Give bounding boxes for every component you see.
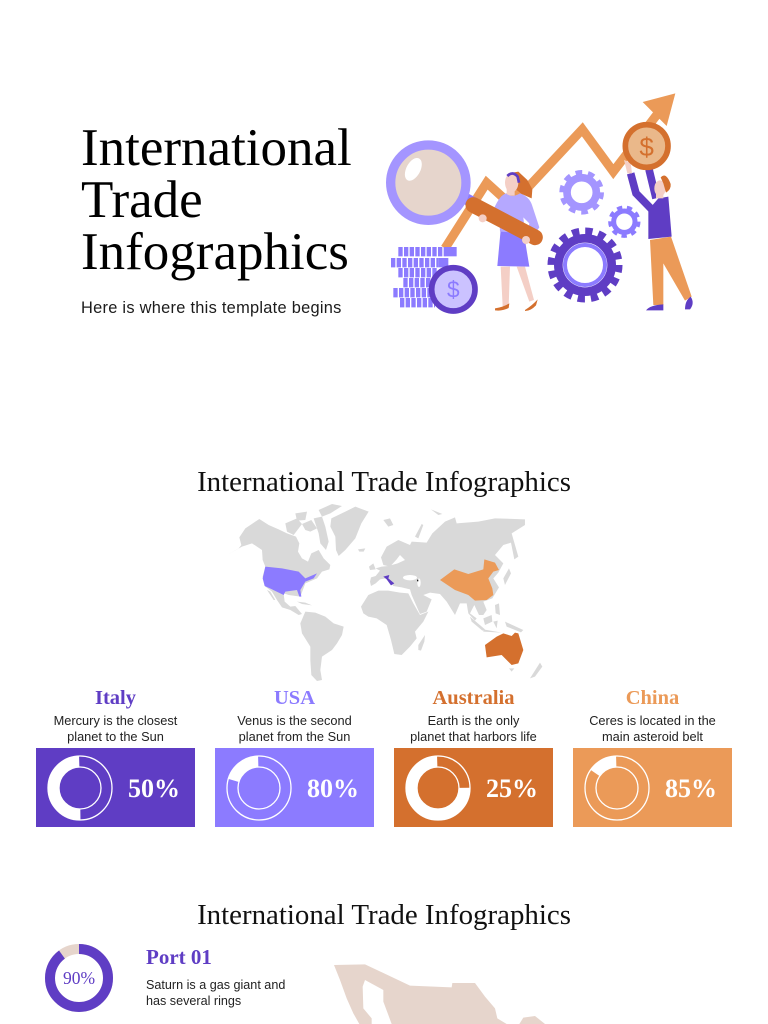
world map	[238, 504, 542, 681]
text: Australia description: planet that harbors life	[410, 729, 537, 744]
donut: USA	[227, 756, 291, 820]
text: China description: Ceres is located in the	[589, 713, 716, 728]
value: 80%: 80%	[307, 774, 359, 803]
country column: Italy	[54, 687, 178, 744]
illustration: trade growth with people, gears and coins	[386, 93, 693, 314]
icon: man lifting coin	[624, 125, 693, 310]
map: Mexico	[334, 964, 545, 1024]
icon: large gear	[551, 231, 619, 299]
text: Port 01 description: Saturn is a gas giant and	[146, 978, 285, 992]
value: 90%: 90%	[63, 968, 95, 988]
text: USA description: planet from the Sun	[239, 729, 350, 744]
icon: coin stack	[391, 252, 457, 303]
title: Trade	[81, 171, 203, 229]
text: Australia description	[410, 713, 537, 744]
donut: Italy	[48, 756, 112, 820]
donut: Australia	[406, 756, 470, 820]
map: USA	[263, 567, 317, 597]
text: Italy description: Mercury is the closest	[54, 713, 177, 728]
map: Italy	[383, 575, 394, 585]
icon: woman holding magnifier	[473, 172, 539, 311]
card: Australia 25%	[394, 748, 553, 827]
subtitle: Here is where this template begins	[81, 299, 342, 317]
country column: Australia	[410, 687, 537, 744]
text: USA description	[237, 713, 352, 744]
country column: USA	[237, 687, 352, 744]
text: Port 01 description: has several rings	[146, 994, 241, 1008]
heading: Australia: Australia	[432, 687, 514, 709]
icon: purple dollar coin: $	[447, 276, 460, 302]
heading: map section: International Trade Infographics	[197, 466, 571, 498]
map: Eurasia, Africa and Oceania	[361, 509, 542, 678]
title	[81, 119, 352, 281]
text: Australia description: Earth is the only	[428, 713, 519, 728]
heading: China: China	[626, 687, 679, 709]
heading: Port 01: Port 01	[146, 945, 212, 969]
map: Australia	[485, 633, 523, 665]
card: Italy 50%	[36, 748, 195, 827]
icon: magnifying glass	[391, 145, 477, 220]
text: USA description: Venus is the second	[237, 713, 352, 728]
text: Port 01 description	[146, 978, 285, 1008]
text: China description: main asteroid belt	[602, 729, 703, 744]
icon: rising arrow	[445, 93, 675, 248]
value: 85%: 85%	[665, 774, 717, 803]
icon: medium gear	[562, 172, 602, 212]
map: China	[440, 559, 499, 601]
icon: small gear	[610, 207, 639, 236]
icon: purple dollar coin	[432, 268, 475, 311]
heading: USA: USA	[274, 687, 315, 709]
value: 50%: 50%	[128, 774, 180, 803]
text: China description	[589, 713, 716, 744]
map: Americas and Greenland	[227, 504, 369, 681]
country column: China	[589, 687, 716, 744]
card: China 85%	[573, 748, 732, 827]
value: 25%: 25%	[486, 774, 538, 803]
title: International	[81, 119, 352, 177]
text: Italy description: planet to the Sun	[67, 729, 164, 744]
title: Infographics	[81, 223, 349, 281]
donut: China	[585, 756, 649, 820]
icon: man lifting coin: $	[639, 132, 654, 162]
card: USA 80%	[215, 748, 374, 827]
text: Italy description	[54, 713, 178, 744]
heading: ports section: International Trade Infographics	[197, 899, 571, 931]
donut: Port 01 90%	[45, 944, 113, 1012]
heading: Italy: Italy	[95, 687, 136, 709]
